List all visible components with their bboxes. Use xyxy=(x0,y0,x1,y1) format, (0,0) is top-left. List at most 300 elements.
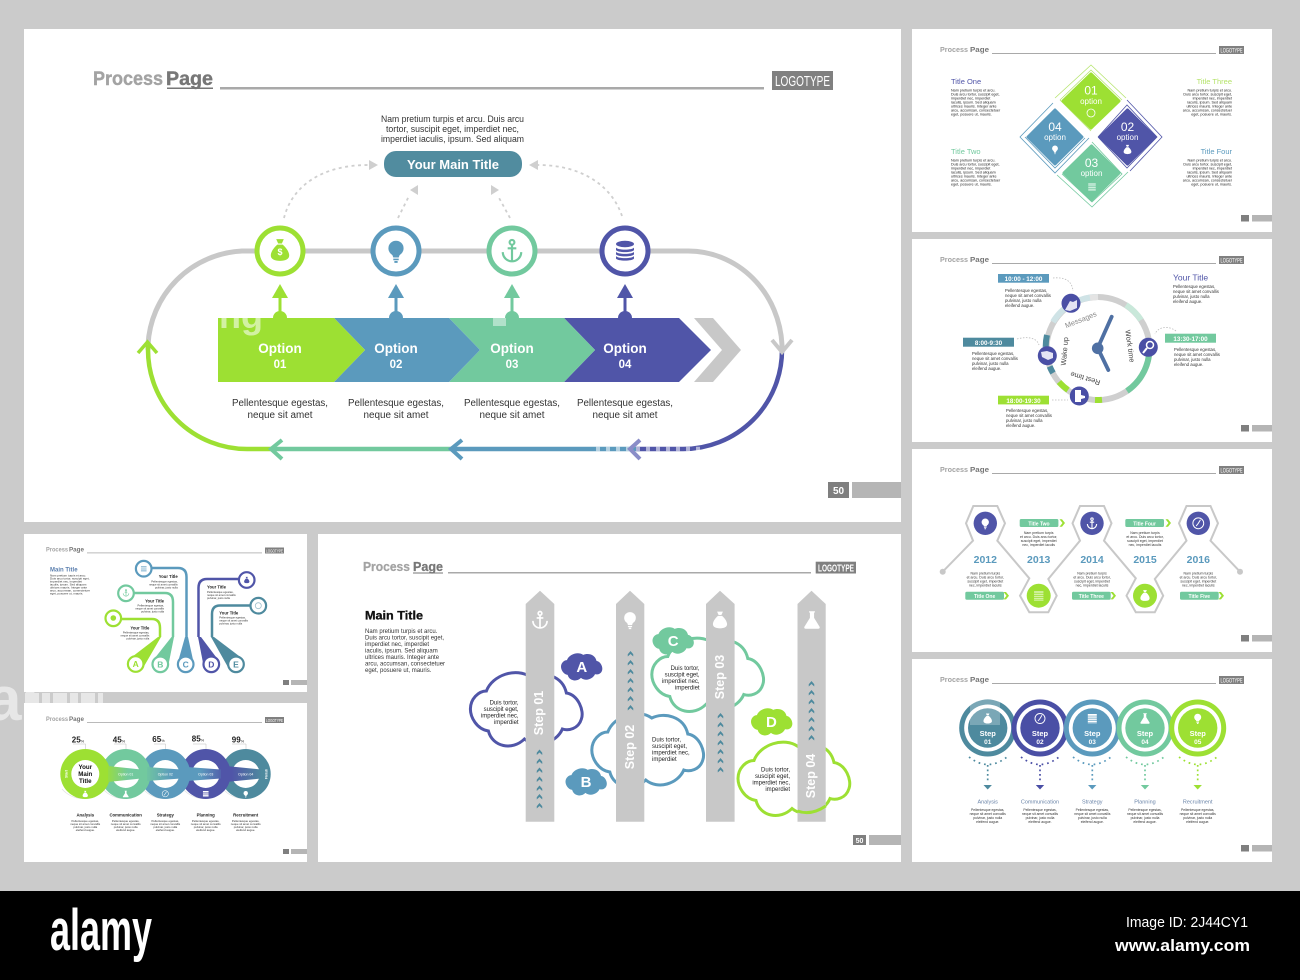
title three block xyxy=(1183,77,1233,117)
heading: process page: LOGOTYPE xyxy=(1220,678,1242,684)
diamond 02: option xyxy=(1117,133,1138,142)
milestone 2013: nec, imperdiet iaculis xyxy=(1022,543,1055,547)
title one block: Title One xyxy=(951,77,981,86)
diamond 01 xyxy=(1063,74,1119,128)
step 01: eleifend augue. xyxy=(976,820,999,824)
diamond 01: option xyxy=(1080,97,1102,106)
option 1 xyxy=(232,228,328,421)
milestone 2013: suscipit eget, imperdiet xyxy=(1021,539,1057,543)
heading: process page: LOGOTYPE xyxy=(818,564,854,574)
ring texts: Start xyxy=(64,769,68,778)
title four block: ultrices mauris. Integer ante xyxy=(1186,175,1232,179)
ring captions: Analysis xyxy=(76,812,95,818)
cloud badge D xyxy=(751,708,792,735)
option 4: Option xyxy=(603,341,647,356)
page number: 50 xyxy=(856,838,863,845)
option 3: 03 xyxy=(506,359,518,371)
title four block: Title Four xyxy=(1201,147,1232,156)
ring captions: Communication xyxy=(109,812,142,818)
diamond 02: 02 xyxy=(1121,120,1134,134)
branch E: Your Title xyxy=(219,610,239,616)
heading: process page: Process xyxy=(940,45,968,54)
page number xyxy=(1241,215,1272,222)
your title block: Pellentesque egestas, xyxy=(1173,284,1215,289)
title one block: arcu, accumsan, consectetuer xyxy=(951,109,1001,113)
cloud outline 3 xyxy=(652,638,764,711)
milestone 2015: 2015 xyxy=(1133,554,1157,566)
time tag 13:30: pulvinar, justo nulla xyxy=(1174,357,1211,362)
milestone 2015: et arcu. Duis arcu tortor, xyxy=(1126,535,1164,539)
diamond 04 xyxy=(1028,110,1082,164)
step 02: 02 xyxy=(1036,739,1044,746)
page number xyxy=(1241,635,1272,642)
step 05: 05 xyxy=(1194,739,1202,746)
title two block: Title Two xyxy=(951,147,981,156)
branch C xyxy=(136,561,194,672)
milestone 2013: Title Two xyxy=(1028,521,1050,527)
title four block: iaculis, ipsum. Sed aliquam xyxy=(1187,171,1232,175)
cloud text 4: imperdiet nec, xyxy=(752,780,790,786)
clock labels xyxy=(1059,309,1137,387)
title four block: eget, posuere ut, mauris. xyxy=(1191,183,1232,187)
branch A: neque sit amet convallis xyxy=(121,634,150,638)
step 02 xyxy=(1012,700,1068,824)
cloud badge C: C xyxy=(668,633,679,650)
cloud text 1: Duis tortor, xyxy=(490,700,519,706)
title four block: imperdiet nec, imperdiet xyxy=(1193,167,1232,171)
diamond 03: 03 xyxy=(1085,156,1098,170)
step 05: neque sit amet convallis xyxy=(1180,812,1216,816)
step 02: neque sit amet convallis xyxy=(1022,812,1058,816)
time tag 8:00: Pellentesque egestas, xyxy=(972,351,1014,356)
ring captions: eleifend augue. xyxy=(236,828,255,832)
ring captions: pulvinar, justo nulla xyxy=(234,825,258,829)
step 02: eleifend augue. xyxy=(1028,820,1052,824)
percentages: 25% xyxy=(72,736,85,744)
arrow column step 04 xyxy=(798,591,826,822)
title three block: Nam pretium turpis et arcu. xyxy=(1188,89,1232,93)
heading: process page xyxy=(940,45,1244,54)
step 01: Pellentesque egestas, xyxy=(971,808,1004,812)
time tag 18:00 xyxy=(998,396,1068,428)
heading: process page: Page xyxy=(970,255,989,264)
panel: cloud steps xyxy=(318,534,901,862)
step 03: Strategy xyxy=(1082,800,1103,806)
branch D: neque sit amet convallis xyxy=(207,593,236,597)
cloud text 4: imperdiet xyxy=(765,787,790,793)
chevron band xyxy=(218,318,741,382)
ring captions: Pellentesque egestas, xyxy=(72,819,99,823)
branch D xyxy=(198,572,254,672)
panel: main four-option process: ng xyxy=(219,295,263,336)
time tag 18:00: neque sit amet convallis xyxy=(1006,413,1052,418)
ring texts: Your xyxy=(78,764,93,771)
cloud text 2: suscipit eget, xyxy=(652,744,687,750)
main title block: imperdiet nec, imperdiet xyxy=(365,642,429,648)
ring texts: Finish xyxy=(264,769,268,779)
main title block: eget, posuere ut, mauris. xyxy=(50,592,83,596)
time tag 8:00: neque sit amet convallis xyxy=(972,356,1018,361)
cloud text 2 xyxy=(652,738,690,763)
your title block: eleifend augue. xyxy=(1173,299,1202,304)
arrow column step 01: Step 01 xyxy=(532,691,546,735)
branch E: Pellentesque egestas, xyxy=(219,616,246,620)
title two block: Duis arcu tortor, suscipit eget, xyxy=(951,163,1000,167)
title four block xyxy=(1183,147,1233,187)
time tag 13:30: eleifend augue. xyxy=(1174,362,1203,367)
ring captions: Pellentesque egestas, xyxy=(192,819,220,823)
step 05: pulvinar, justo nulla xyxy=(1183,816,1212,820)
dashed arrows to title xyxy=(284,160,622,218)
branch A: Your Title xyxy=(130,626,150,630)
cloud text 4: Duis tortor, xyxy=(761,768,790,774)
time tag 10:00: Pellentesque egestas, xyxy=(1005,288,1047,293)
milestone 2016 xyxy=(1180,512,1224,600)
title three block: iaculis, ipsum. Sed aliquam xyxy=(1187,101,1232,105)
time tag 13:30 xyxy=(1155,327,1220,367)
arrow column step 03 xyxy=(706,591,735,822)
main title pill xyxy=(384,151,522,177)
milestone 2012: Title One xyxy=(974,594,995,600)
ring captions: Recruitment xyxy=(233,812,259,818)
heading: process page: Process xyxy=(940,675,968,684)
title four block: Duis arcu tortor, suscipit eget, xyxy=(1183,163,1232,167)
diamond outlines xyxy=(1020,65,1162,207)
panel: main four-option process xyxy=(24,29,901,522)
heading: process page: Page xyxy=(970,675,989,684)
option 3: Pellentesque egestas, xyxy=(464,398,560,409)
title three block: imperdiet nec, imperdiet xyxy=(1193,97,1232,101)
heading: process page: Page xyxy=(413,560,443,574)
time tag 10:00 xyxy=(998,274,1073,308)
time tag 8:00: pulvinar, justo nulla xyxy=(972,361,1009,366)
cloud outline 4 xyxy=(738,742,850,815)
heading: process page xyxy=(363,560,856,574)
branch D: pulvinar, justo nulla xyxy=(207,596,230,600)
milestone 2016: nec, imperdiet iaculis xyxy=(1182,584,1215,588)
percentages: 45% xyxy=(113,736,126,744)
step 01: Step xyxy=(980,729,996,738)
clock hands xyxy=(1092,317,1112,370)
ring captions: eleifend augue. xyxy=(156,828,175,832)
cloud text 1: imperdiet nec, xyxy=(481,714,519,720)
step 01 xyxy=(959,700,1016,824)
page number xyxy=(853,835,901,845)
option 4: 04 xyxy=(619,359,632,371)
logotype: LOGOTYPE xyxy=(775,73,830,90)
page number xyxy=(1241,425,1272,432)
cloud text 3: imperdiet xyxy=(675,686,700,692)
diamond 03: option xyxy=(1081,169,1102,178)
time tag 8:00: 8:00-9:30 xyxy=(975,340,1003,347)
main title pill: Your Main Title xyxy=(407,157,499,172)
ring captions: pulvinar, justo nulla xyxy=(153,825,178,829)
option 4 xyxy=(577,228,673,421)
branch B: pulvinar, justo nulla xyxy=(141,610,165,614)
time tag 10:00: eleifend augue. xyxy=(1005,303,1034,308)
option 1: $ xyxy=(277,247,283,257)
image id: Image ID: 2J44CY1 xyxy=(1126,914,1248,931)
step 03: Pellentesque egestas, xyxy=(1076,808,1109,812)
page number xyxy=(1241,845,1272,852)
ring texts: Option 02 xyxy=(158,772,173,776)
title one block: imperdiet nec, imperdiet xyxy=(951,97,990,101)
time tag 18:00: eleifend augue. xyxy=(1006,423,1035,428)
title four block: Nam pretium turpis et arcu. xyxy=(1188,159,1232,163)
milestone 2012: suscipit eget, imperdiet xyxy=(967,580,1003,584)
milestone 2012 xyxy=(965,512,1009,600)
ring captions: Planning xyxy=(197,812,215,818)
cloud text 4 xyxy=(752,768,790,793)
main title block: Nam pretium turpis et arcu. xyxy=(50,574,86,578)
ring texts: Title xyxy=(79,778,92,785)
panel: branching tree xyxy=(24,534,307,692)
milestone 2015: Nam pretium turpis xyxy=(1130,531,1160,535)
ring captions: neque sit amet convallis xyxy=(150,822,181,826)
clock labels: Wake up xyxy=(1059,337,1070,366)
main title block xyxy=(50,568,90,596)
ring texts: Main xyxy=(78,771,93,778)
milestone 2013: 2013 xyxy=(1027,554,1051,566)
heading: process page: LOGOTYPE xyxy=(266,548,283,554)
cloud badge A xyxy=(561,653,602,680)
heading: process page: Process xyxy=(93,69,163,90)
cloud outline 2 xyxy=(592,714,704,787)
ring captions: pulvinar, justo nulla xyxy=(194,825,218,829)
heading: process page: Process xyxy=(363,560,410,574)
branch C: C xyxy=(183,659,189,669)
ring texts: Option 04 xyxy=(238,772,253,776)
diamond 03 xyxy=(1064,146,1119,200)
page number: 50 xyxy=(833,486,844,497)
milestone 2012: nec, imperdiet iaculis xyxy=(969,584,1002,588)
cloud text 3: imperdiet nec, xyxy=(662,679,700,685)
your title block: Your Title xyxy=(1173,272,1208,282)
step 04: 04 xyxy=(1141,739,1149,746)
title two block: arcu, accumsan, consectetuer xyxy=(951,179,1001,183)
step 02: pulvinar, justo nulla xyxy=(1026,816,1055,820)
option 1: Pellentesque egestas, xyxy=(232,398,328,409)
heading: process page: LOGOTYPE xyxy=(266,718,283,723)
milestone 2014: Title Three xyxy=(1079,594,1104,600)
main title block: Main Title xyxy=(50,568,78,574)
clock labels: Rest time xyxy=(1069,370,1101,387)
cloud text 3: Duis tortor, xyxy=(671,666,700,672)
cloud text 3 xyxy=(662,666,700,692)
ring captions: eleifend augue. xyxy=(76,828,95,832)
clock labels: Messages xyxy=(1064,309,1098,330)
ring captions: neque sit amet convallis xyxy=(191,822,221,826)
step 03 xyxy=(1064,700,1121,824)
intro text: imperdiet iaculis, ipsum. Sed aliquam xyxy=(381,134,524,144)
branch C: pulvinar, justo nulla xyxy=(155,586,178,590)
heading: process page: Page xyxy=(69,717,85,723)
time tag 8:00: eleifend augue. xyxy=(972,366,1001,371)
heading: process page xyxy=(46,717,284,723)
step 05 xyxy=(1169,700,1226,824)
step 05: Step xyxy=(1190,729,1206,738)
branch C: neque sit amet convallis xyxy=(149,582,178,586)
arrow column step 01 xyxy=(526,591,554,822)
milestone 2014: 2014 xyxy=(1080,554,1104,566)
step 02: Pellentesque egestas, xyxy=(1023,808,1057,812)
option 1: 01 xyxy=(274,359,287,371)
branch B: Pellentesque egestas, xyxy=(138,604,164,608)
milestone 2015: suscipit eget, imperdiet xyxy=(1127,539,1163,543)
time tag 13:30: neque sit amet convallis xyxy=(1174,352,1220,357)
cloud badge B xyxy=(566,768,607,795)
milestone 2014: et arcu. Duis arcu tortor, xyxy=(1073,576,1111,580)
step 05: Pellentesque egestas, xyxy=(1181,808,1214,812)
branch E xyxy=(211,598,266,672)
arrow column step 03: Step 03 xyxy=(713,655,727,699)
percentages: 85% xyxy=(192,734,205,744)
step 01: 01 xyxy=(984,739,992,746)
panel: hexagon timeline xyxy=(912,449,1272,652)
title one block: iaculis, ipsum. Sed aliquam xyxy=(951,101,996,105)
option 4: neque sit amet xyxy=(592,410,658,421)
diamond 04: option xyxy=(1044,133,1066,142)
time tag 18:00: Pellentesque egestas, xyxy=(1006,408,1048,413)
heading: process page xyxy=(93,69,764,90)
heading: process page: Page xyxy=(69,548,85,554)
option 2: Option xyxy=(374,341,418,356)
main title block: eget, posuere ut, mauris. xyxy=(365,668,432,674)
branch A: pulvinar, justo nulla xyxy=(126,636,150,640)
intro text: Nam pretium turpis et arcu. Duis arcu xyxy=(381,114,524,124)
branch D: Pellentesque egestas, xyxy=(207,590,234,594)
main title block: arcu, accumsan, consectetuer xyxy=(365,662,445,668)
cloud text 2: Duis tortor, xyxy=(652,738,681,744)
ring captions: neque sit amet convallis xyxy=(231,822,261,826)
step 04: Pellentesque egestas, xyxy=(1128,808,1162,812)
percentages xyxy=(72,734,246,749)
cloud text 1: imperdiet xyxy=(494,720,519,726)
title three block: arcu, accumsan, consectetuer xyxy=(1183,109,1233,113)
main title block: Main Title xyxy=(365,608,423,622)
page number xyxy=(283,680,307,685)
heading: process page xyxy=(940,465,1244,474)
heading: process page: Process xyxy=(46,717,69,723)
panel: clock xyxy=(912,239,1272,442)
step 03: pulvinar, justo nulla xyxy=(1078,816,1107,820)
heading: process page: Process xyxy=(46,548,69,554)
heading: process page xyxy=(46,548,284,554)
branch E: E xyxy=(233,659,239,669)
branch D: Your Title xyxy=(207,584,227,590)
your title block: neque sit amet convallis xyxy=(1173,289,1219,294)
branch E: neque sit amet convallis xyxy=(219,618,249,622)
cloud text 1: suscipit eget, xyxy=(484,707,519,713)
main title block: imperdiet nec, imperdiet xyxy=(50,580,82,584)
footer logo: alamy xyxy=(50,898,152,963)
title three block: ultrices mauris. Integer ante xyxy=(1186,105,1232,109)
cloud badge D: D xyxy=(766,714,777,731)
title two block: imperdiet nec, imperdiet xyxy=(951,167,990,171)
step 03: 03 xyxy=(1089,739,1096,746)
option 3: Option xyxy=(490,341,534,356)
logotype xyxy=(772,71,833,90)
ring captions: pulvinar, justo nulla xyxy=(73,825,98,829)
heading: process page: Process xyxy=(940,255,968,264)
milestone 2013 xyxy=(1020,519,1065,608)
step 04: pulvinar, justo nulla xyxy=(1131,816,1160,820)
time tag 10:00: neque sit amet convallis xyxy=(1005,293,1051,298)
title two block xyxy=(951,147,1001,187)
step 05: eleifend augue. xyxy=(1186,820,1209,824)
title one block: Nam pretium turpis et arcu. xyxy=(951,89,995,93)
step 02: Step xyxy=(1032,729,1049,738)
main title block: ultrices mauris. Integer ante xyxy=(365,655,440,661)
step 01: Analysis xyxy=(977,800,998,806)
option 2: 02 xyxy=(390,359,402,371)
time tag 13:30: 13:30-17:00 xyxy=(1173,336,1208,343)
cloud badge B: B xyxy=(581,774,592,791)
branch B xyxy=(118,586,174,672)
your title block xyxy=(1173,272,1219,304)
branch B: neque sit amet convallis xyxy=(135,606,165,610)
page number xyxy=(828,482,901,498)
branch C: Pellentesque egestas, xyxy=(151,580,178,584)
ring texts: Option 01 xyxy=(118,772,133,776)
option 1: neque sit amet xyxy=(248,410,313,421)
title three block: eget, posuere ut, mauris. xyxy=(1191,113,1232,117)
milestone 2012: Nam pretium turpis xyxy=(971,572,1000,576)
branch B: Your Title xyxy=(145,598,165,604)
ring captions: Pellentesque egestas, xyxy=(152,819,179,823)
milestone 2014: Nam pretium turpis xyxy=(1077,572,1107,576)
footer band xyxy=(0,891,1300,980)
ring texts: Option 03 xyxy=(198,772,213,776)
option 1: Option xyxy=(258,341,302,356)
arrow column step 02: Step 02 xyxy=(623,725,637,769)
milestone 2015: Title Four xyxy=(1133,521,1156,527)
ring chain xyxy=(60,749,271,799)
ring captions: Strategy xyxy=(157,812,175,818)
title two block: eget, posuere ut, mauris. xyxy=(951,183,992,187)
percentages: 99% xyxy=(232,736,245,744)
ring captions: neque sit amet convallis xyxy=(70,822,101,826)
option 2: neque sit amet xyxy=(364,410,429,421)
milestone 2013: et arcu. Duis arcu tortor, xyxy=(1020,535,1057,539)
panel: linked rings xyxy=(24,703,307,862)
ring captions: neque sit amet convallis xyxy=(111,822,141,826)
percentages: 65% xyxy=(152,735,165,744)
heading: process page: Process xyxy=(940,465,968,474)
ring captions: eleifend augue. xyxy=(196,828,215,832)
title one block: Duis arcu tortor, suscipit eget, xyxy=(951,93,1000,97)
step 04: Planning xyxy=(1134,800,1156,806)
cloud badge C xyxy=(652,627,694,654)
time tag 13:30: Pellentesque egestas, xyxy=(1174,347,1216,352)
main title block: Duis arcu tortor, suscipit eget, xyxy=(50,576,90,580)
step 01: neque sit amet convallis xyxy=(970,812,1006,816)
milestone 2015: nec, imperdiet iaculis xyxy=(1129,543,1162,547)
step 02: Communication xyxy=(1021,800,1059,806)
option 3: neque sit amet xyxy=(480,410,545,421)
step 04: neque sit amet convallis xyxy=(1127,812,1163,816)
cloud text 4: suscipit eget, xyxy=(755,774,790,780)
time tag 18:00: 18:00-19:30 xyxy=(1006,398,1041,405)
site address: www.alamy.com xyxy=(1114,936,1250,955)
milestone 2015 xyxy=(1125,519,1171,608)
ring captions: Pellentesque egestas, xyxy=(232,819,260,823)
title four block: arcu, accumsan, consectetuer xyxy=(1183,179,1233,183)
milestone 2012: 2012 xyxy=(974,554,997,566)
ring captions: eleifend augue. xyxy=(116,828,135,832)
milestone 2016: Title Five xyxy=(1189,594,1210,600)
ring captions: pulvinar, justo nulla xyxy=(114,825,138,829)
